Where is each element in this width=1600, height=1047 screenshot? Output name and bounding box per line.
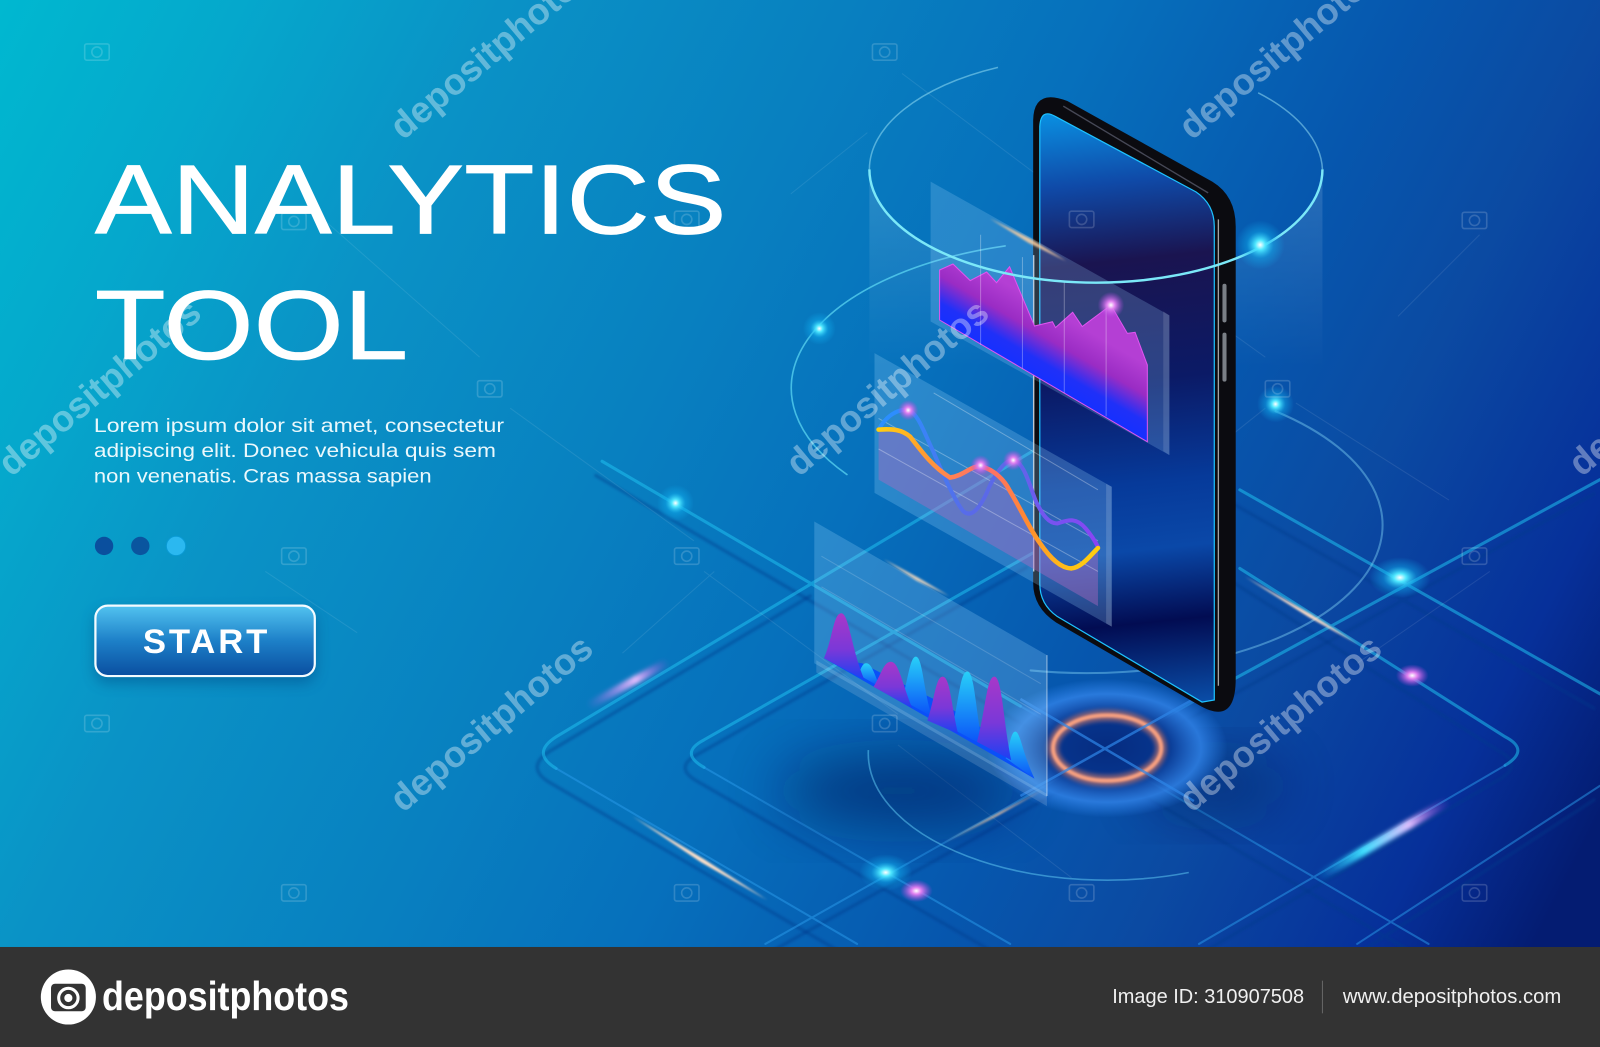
start button [95, 606, 315, 683]
footer bar [0, 947, 1600, 1047]
start button: START [143, 623, 267, 661]
chart panel: peak chart [814, 521, 1047, 806]
panel base strip [816, 660, 1047, 806]
middle ring back arcs [791, 246, 1383, 673]
glass cylinder column [869, 169, 1322, 367]
chart fill [879, 429, 1098, 606]
website url: www.depositphotos.com [1342, 986, 1561, 1008]
sparkles [657, 220, 1431, 902]
image id: Image ID: 310907508 [1112, 986, 1304, 1008]
glowing base circle [868, 679, 1228, 880]
area chart shape [940, 264, 1147, 442]
phone edge highlights and buttons [1034, 106, 1224, 686]
phone body [1033, 97, 1236, 712]
top ring front arc [869, 169, 1322, 283]
pagination dots [95, 536, 186, 556]
isometric floor lines [537, 451, 1600, 958]
panel highlight streak [884, 559, 949, 596]
watermark text: depositphotos [778, 291, 996, 484]
top ring back arc [869, 67, 1322, 170]
title: TOOL [95, 270, 408, 380]
light streaks [592, 577, 1447, 900]
title [95, 145, 727, 380]
watermark text: depositphotos [382, 627, 600, 819]
watermark text: depositphotos [1171, 627, 1389, 819]
body text: non venenatis. Cras massa sapien [94, 466, 432, 488]
chart peak glow [1098, 292, 1124, 318]
title: ANALYTICS [95, 145, 727, 255]
watermark camera icons [85, 44, 1487, 901]
chart panel: line chart [874, 353, 1112, 627]
faint grid lines around cameras [265, 73, 1490, 878]
chart panel: area chart [931, 182, 1169, 455]
panel side highlight [1110, 515, 1112, 577]
phone screen [1040, 114, 1214, 702]
line chart peak glows [898, 400, 1023, 476]
ground shadow [781, 758, 1286, 824]
blue line series [879, 410, 1098, 547]
body text: adipiscing elit. Donec vehicula quis sem [94, 440, 496, 462]
watermark text [0, 0, 1600, 819]
body text: Lorem ipsum dolor sit amet, consectetur [94, 415, 505, 437]
blue base peaks [824, 658, 1034, 779]
yellow line series [879, 429, 1098, 568]
footer logo icon [41, 969, 96, 1025]
cyan peaks [858, 657, 1034, 779]
footer logo text: depositphotos [102, 973, 349, 1019]
phone [1033, 97, 1236, 712]
purple peaks [824, 613, 1011, 760]
body text [94, 415, 505, 488]
panel highlight streak [990, 218, 1066, 261]
